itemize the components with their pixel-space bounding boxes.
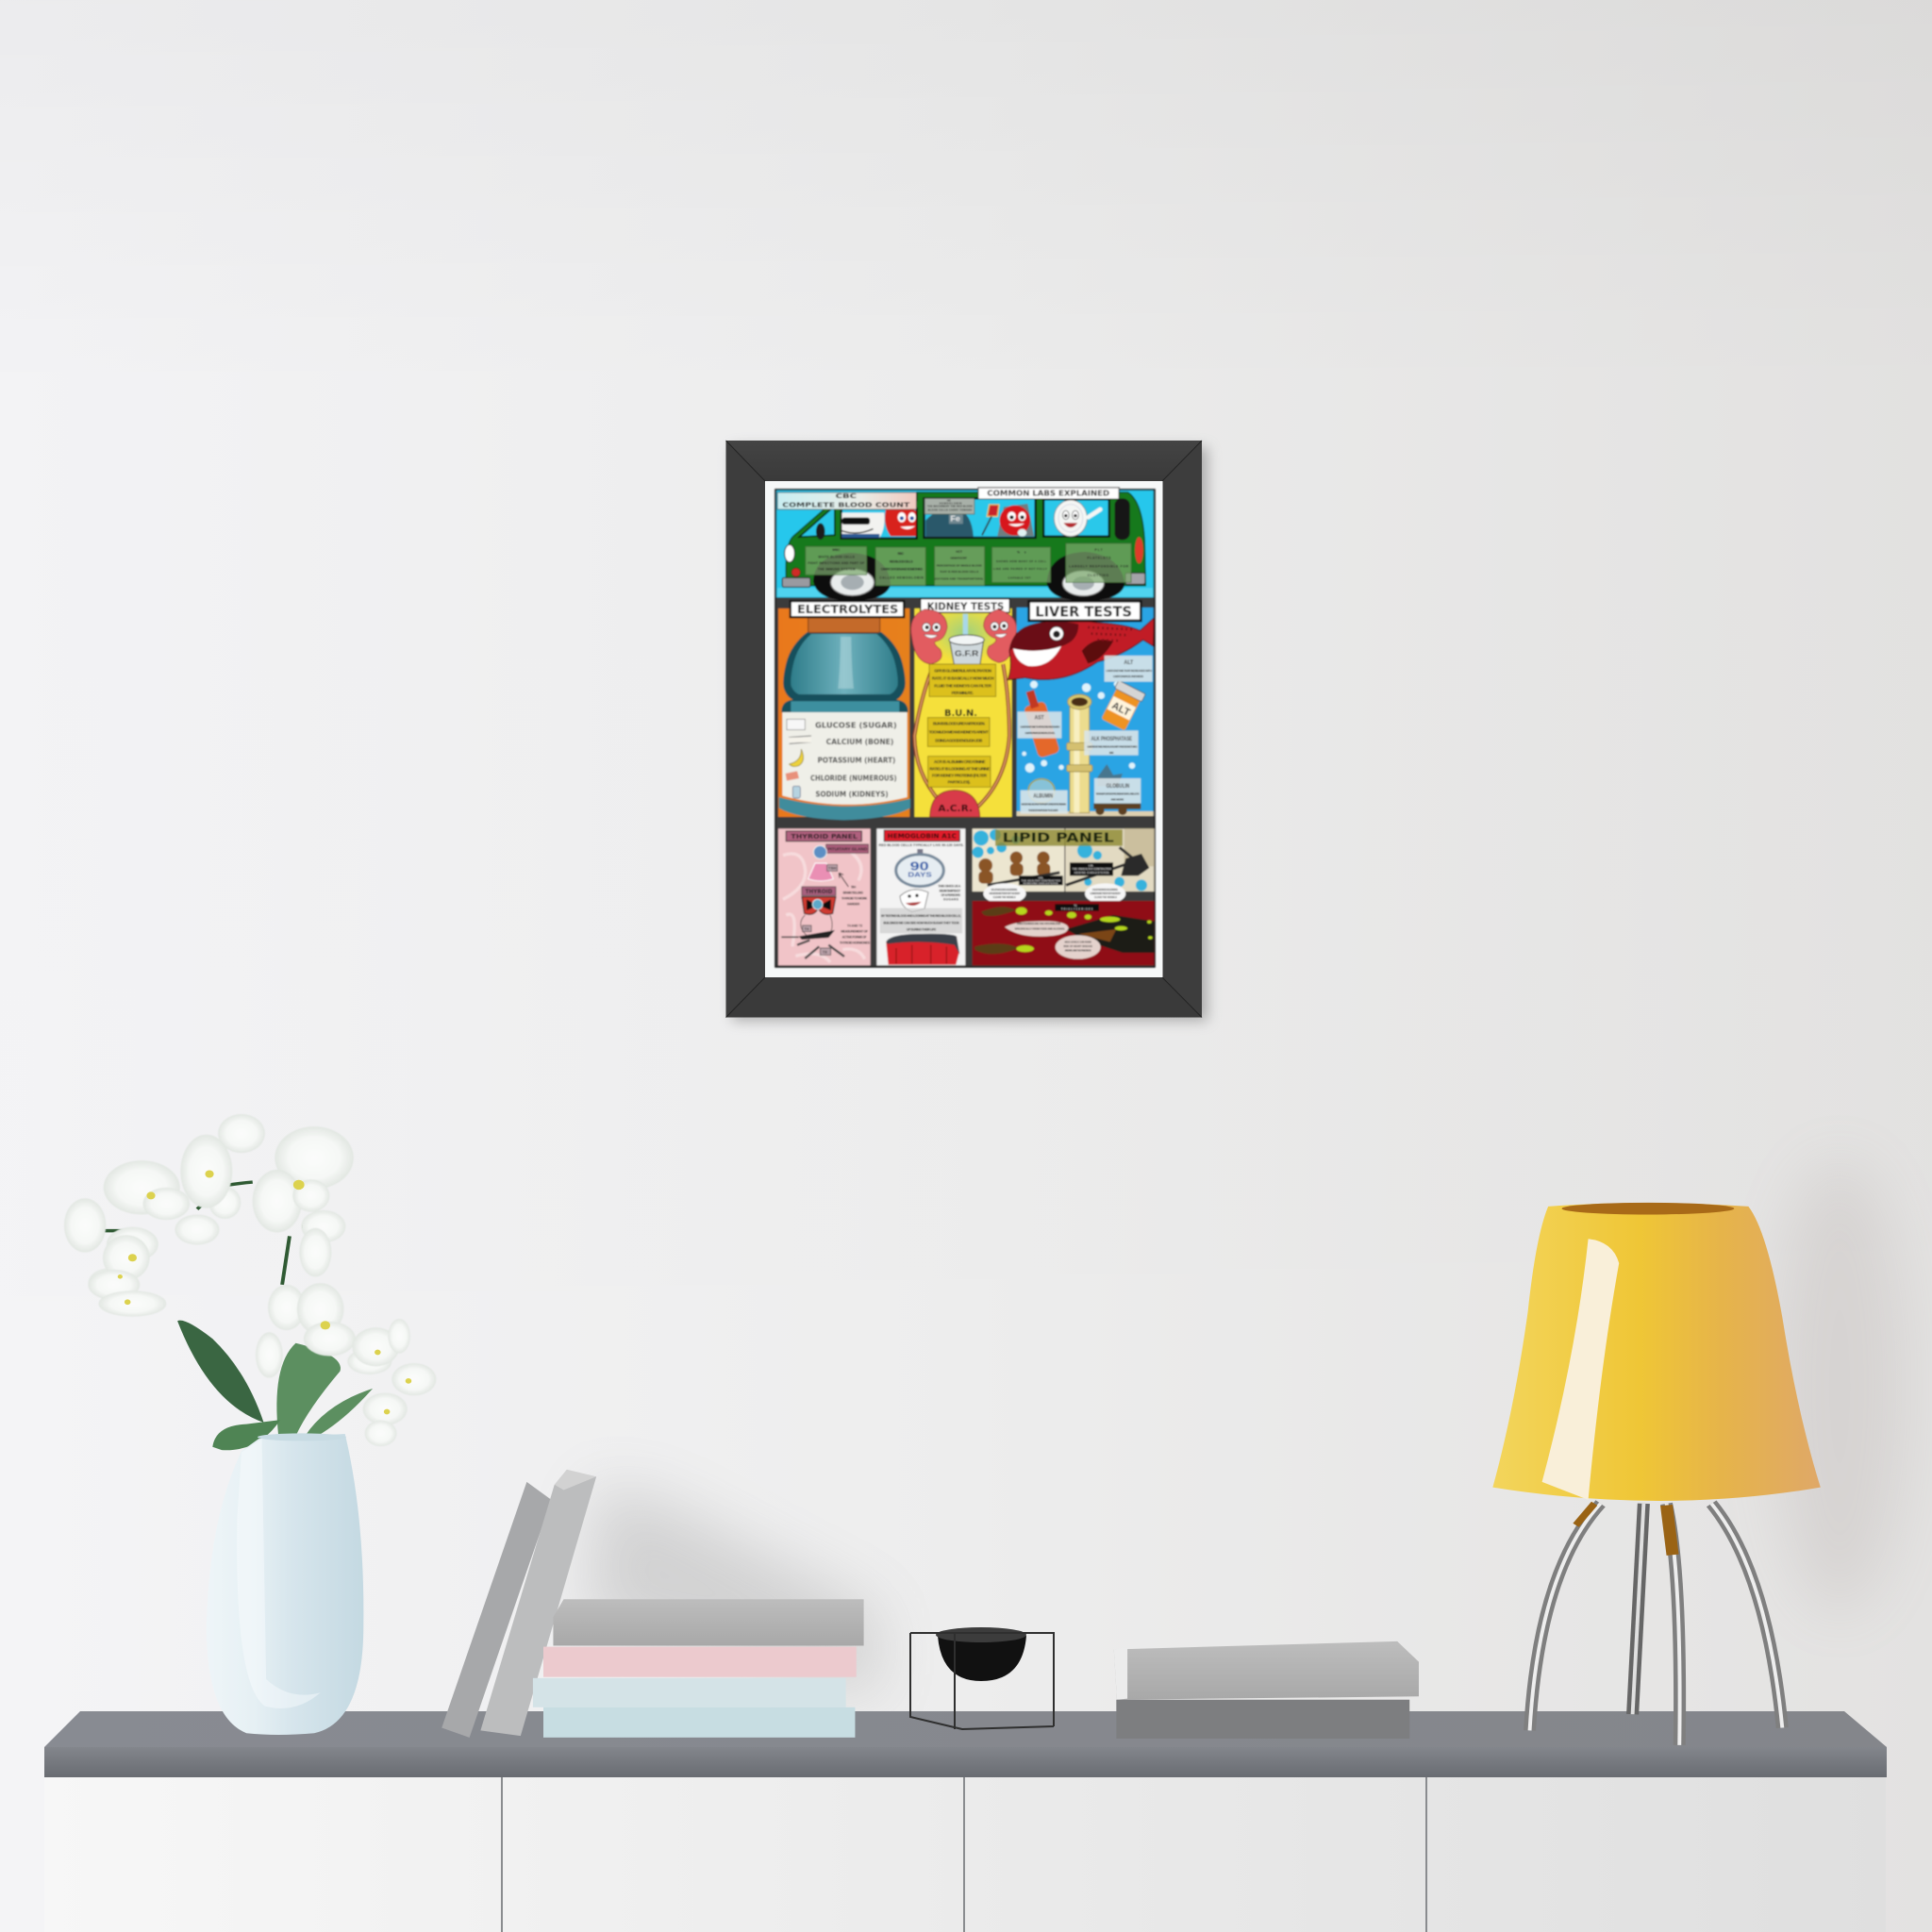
poster artwork [775,488,1155,967]
left kidney [911,609,947,664]
ALK phosphatase box: LIVER ENZYME AND ALKALINITY AND SOMETHING [1087,745,1138,749]
T4 T3 note: MEASUREMENT OF [841,930,868,934]
lower red scene [973,901,1154,965]
title: electrolytes [790,600,905,618]
orange background [778,608,909,817]
sideboard shelf [44,1711,1887,1777]
BUN text box: BUN IS BLOOD UREA NITROGEN. [933,722,985,726]
triglycerides label: TRIGLYCERIDES [1061,908,1093,910]
road streak [777,588,1153,597]
ALT box: LIVER DAMAGE AND MEDS [1113,675,1143,678]
window: hemoglobin iron and red cell: Fe [951,514,960,524]
LDL cloud: CLOGS THE VESSELS [1094,897,1117,899]
glucose row: GLUCOSE (SUGAR) [815,722,897,730]
T3 label: T3 [823,949,827,954]
testing note band: BUILDINGS WE CAN SEE HOW MUCH SUGAR THEY TOOK [883,921,960,924]
ACR text box: RATIO. IT IS LOOKING AT THE URINE [929,766,990,771]
globulin box: GLOBULIN [1107,783,1129,790]
red bag [886,934,959,965]
triglyceride cloud one [1005,921,1069,937]
thyroid label [802,887,836,895]
chloride row: CHLORIDE (NUMEROUS) [810,774,897,782]
blue splats [973,829,1147,891]
rear window [1114,498,1130,540]
HCT info box: PERCENTAGE OF WHOLE BLOOD [937,563,982,567]
ALK phosphatase box: ELSE [1109,751,1114,755]
TSH note: HARDER [847,902,860,906]
PLT info box: CLOTTING [1088,574,1108,577]
vase [207,1433,363,1735]
GFR cup [949,635,984,666]
AST box [1018,711,1061,739]
snapshot note: 90 DAY SNAPSHOT [940,889,960,892]
triglyceride cloud two: AND INFLAME THE PANCREAS [1065,950,1091,953]
white background [876,828,965,965]
ALT box: ALT [1124,659,1133,666]
snapshot note: SUGARS [943,897,959,901]
HCT info box: THAT IS RED BLOOD CELLS [940,570,978,574]
cabinet doors [44,1777,1886,1932]
ACR dome [930,791,980,817]
cart [1093,804,1141,815]
BUN text box: TOO MUCH MEANS KIDNEYS AREN'T [929,730,989,735]
AST box: LIVER ENZYME THAT INCREASES WITH [1021,724,1059,728]
LDL box: THE UNHEALTHY CONTRACTOR [1073,867,1111,871]
snapshot note [938,885,961,901]
orchid flowers [64,1114,436,1446]
T4 T3 note: T4 AND T3 [847,924,862,927]
pituitary gland globe [813,845,826,858]
black bowl [936,1627,1026,1681]
T4 T3 note: THYROID HORMONES [840,941,871,945]
AST sauce bottle [1020,688,1060,758]
percent info box: LINE ARE PAIRED IF NOT FULLY [993,567,1047,571]
flower centres [118,1170,411,1414]
bottle [781,632,908,712]
blood cell character [900,890,928,912]
HG info box: THE MACHINERY THE RED BLOOD [927,505,973,508]
HCT info box: (OXYGEN AND TRANSPORTERS) [935,576,983,580]
TSH note: TSH [851,886,857,890]
TSH label: TSH [828,866,836,871]
RBC info box: CARRY OXYGEN AND SOMETHING [881,568,924,572]
HG info box: HG [947,499,951,503]
AST box: LIVER DAMAGE AND ALCOHOL [1025,731,1056,735]
monkeys [978,852,1050,884]
yellow background [914,608,1012,817]
potassium row [790,749,895,767]
HG info box [924,498,974,514]
CBC heading: CBC [836,492,857,500]
sea floor [1017,811,1154,816]
TSH note: BRAIN TELLING [843,891,863,895]
straw [963,614,968,639]
albumin box: ALBUMIN [1033,792,1053,799]
triglyceride cloud one: TRIGLYCERIDES ARE THE FATS IN BLOOD [1017,922,1060,925]
ACR text box: PARTICLES). [948,780,971,785]
blue background [1017,608,1154,816]
HCT info box [935,546,985,586]
panel: hemoglobin A1C [876,828,965,965]
framed poster [726,441,1208,1021]
ALK phosphatase box: ALK PHOSPHATASE [1091,736,1132,742]
filter tube [914,664,1009,807]
title: common labs explained: COMMON LABS EXPLAINED [987,490,1109,498]
grey book on stack [553,1599,864,1645]
leaning book left [441,1482,551,1738]
testing note band: UP DURING THEIR LIFE [907,928,937,932]
globulin box: TRANSPORTER PROTEIN FOR PLATELETS [1096,792,1140,796]
label [782,712,908,805]
brass pipe [1067,694,1092,813]
bubbles [1022,681,1135,773]
GFR text box: PER MINUTE. [952,691,974,695]
PLT info box: LARGELY RESPONSIBLE FOR [1069,565,1129,569]
panel: thyroid panel [778,828,871,965]
HDL box: THE HEALTHY CONTRACTOR [1022,878,1060,882]
frame shadow [732,447,1208,1021]
blue book [543,1707,855,1738]
triglyceride cloud two [1056,935,1101,959]
WBC info box: WHITE BLOOD CELLS [818,555,856,558]
calcium row: CALCIUM (BONE) [826,738,893,746]
ALT pill bottle: ALT [1110,700,1132,719]
sky [776,491,1154,597]
title: liver tests [1027,600,1142,622]
headlight [785,544,794,562]
tail light [1135,537,1143,563]
wire cube [910,1633,1054,1729]
WBC info box: THE IMMUNE SYSTEM [818,568,856,572]
artwork background [775,490,1155,967]
PLT info box [1066,543,1131,582]
ALT box [1105,656,1153,682]
HG info box: HEMOGLOBIN [940,501,961,505]
triglyceride cloud two: RISK OF HEART DISEASE [1063,945,1092,948]
whale [1008,618,1154,680]
lamp legs [1530,1504,1782,1745]
green glow [929,606,1002,662]
snapshot note: THIS GIVES US A [938,885,961,889]
GFR text box: FLUID THE KIDNEYS CAN FILTER [934,683,992,688]
triglycerides label [1055,904,1099,911]
title: lipid panel: LIPID PANEL [1003,832,1114,846]
CBC heading: COMPLETE BLOOD COUNT [782,501,910,509]
RBC info box: CALLED HEMOGLOBIN [879,575,924,579]
GFR text box: GFR IS GLOMERULAR FILTRATION [934,669,991,674]
HDL box: HDL [1039,875,1044,879]
orchid stem [95,1182,324,1285]
HDL cloud: HIGHER IS BETTER FOR THE BODY [990,893,1021,895]
sodium row [792,786,889,798]
HDL cloud [983,883,1026,904]
PLT info box: PLT [1095,548,1103,552]
WBC info box: WBC [832,548,841,552]
pink book [543,1647,857,1677]
HDL box [1019,875,1063,885]
title: lipid panel [995,829,1123,846]
thyroid label: THYROID [806,889,832,895]
lower dark book [1116,1700,1409,1739]
upper scene [973,828,1064,891]
title: liver tests: LIVER TESTS [1035,604,1132,620]
rear bumper [1125,573,1145,584]
HDL box: REMOVING CHOLESTEROL [1024,881,1058,885]
ACR text box: ACR IS ALBUMIN CREATININE [934,759,986,764]
panel: electrolytes [778,600,910,820]
pink background [778,828,871,965]
ALT pill bottle [1100,680,1145,731]
globulin box: AND MORE [1110,798,1124,802]
cube with black bowl [910,1627,1054,1729]
hallway wall [1124,828,1154,866]
leaves [177,1321,373,1450]
albumin box [1021,791,1068,814]
hormone ship [781,915,844,958]
WBC info box [806,546,867,575]
leaning book right [480,1470,596,1736]
T4 T3 note: ACTIVE FORMS OF [842,936,867,940]
thyroid butterfly [802,897,836,914]
HDL cloud: HDL IS THE GOOD CHOLESTEROL [991,890,1018,891]
white mat [765,481,1162,977]
T3 label [820,948,831,955]
stopwatch: DAYS [908,870,932,878]
front wheel [813,553,891,601]
pituitary label [826,844,869,853]
lifespan sentence: RED BLOOD CELLS TYPICALLY LIVE 90-120 DAYS. [879,843,964,847]
calcium row [789,736,893,746]
right shelf objects [1114,1203,1821,1745]
chloride row [786,771,897,782]
snapshot note: OF A PERSON'S [941,893,961,897]
BUN text box [927,718,990,746]
title [786,831,861,841]
triglyceride cloud two: HIGH LEVELS CAN RAISE [1064,941,1091,943]
front bumper [782,577,810,587]
triglycerides label: TG [1074,906,1077,908]
driver mirror [816,524,824,540]
left shelf objects [64,1114,864,1738]
TSH note: THYROID TO WORK [841,896,868,900]
HCT info box: HCT [956,550,962,554]
title: HEMOGLOBIN A1C [888,832,957,841]
dark arm [988,847,1144,885]
windshield [799,506,835,537]
pale blue book [533,1678,846,1707]
RBC info box [875,547,925,586]
marbled texture [783,849,865,962]
triglyceride cloud one: SPECIFICALLY FROM FOOD AND ALCOHOL [1015,926,1065,930]
LDL cloud [1085,883,1125,904]
window: platelet character [1043,499,1109,537]
WBC info box: FIGHT INFECTIONS AND PART OF [808,561,864,565]
ACR dome: A.C.R. [938,804,973,814]
pink cone [808,863,833,881]
arrow [839,873,848,887]
HDL cloud: CLEANS THE VESSELS [993,896,1016,899]
glucose row [787,719,897,730]
bottle cap [808,617,880,633]
orchid [64,1114,436,1450]
title: common labs explained [978,488,1119,499]
lamp shade [1492,1203,1821,1501]
TSH note [841,886,868,906]
black picture frame [726,441,1202,1017]
percent info box: CAPABLE YET [1008,575,1031,579]
stopwatch [896,849,943,887]
panel: kidney tests [911,599,1017,817]
window: hemoglobin iron and red cell [924,498,1036,538]
albumin box: THE BODY MADE BY THE LIVER [1028,808,1059,812]
pituitary label: PITUITARY GLAND [827,847,868,853]
AST box: AST [1035,715,1044,722]
title: electrolytes: ELECTROLYTES [797,603,898,616]
title: kidney tests: KIDNEY TESTS [927,601,1004,613]
BUN heading: B.U.N. [944,708,977,719]
GFR text box: RATE. IT IS BASICALLY HOW MUCH [932,676,994,681]
LDL box [1070,862,1113,875]
upper grey book [1114,1641,1419,1700]
bottle base [779,797,910,820]
LDL box: LDL [1089,863,1094,867]
rear wheel [1047,552,1124,601]
PLT info box: PLATELETS [1087,557,1111,560]
T4 T3 note [840,924,871,945]
sponge character [1028,779,1055,803]
HCT info box: HEMATOCRIT [951,557,967,560]
LDL cloud: LOWER IS BETTER FOR THE BODY [1090,893,1121,895]
percent info box [991,547,1051,582]
title: THYROID PANEL [791,833,858,841]
RBC info box: RED BLOOD CELLS [890,560,913,564]
testing note band: BY TESTING BLOOD AND LOOKING AT THE RED BLOOD CELLS, [881,914,961,918]
ACR text box: FOR KIDNEY PROTEINS (FILTER [932,774,988,778]
ACR text box [928,757,991,787]
LDL box: ADDING CHOLESTEROL [1074,871,1109,874]
panel: lipid panel [973,828,1154,965]
CBC heading [777,492,916,509]
albumin box: MOST ABUNDANT TRANSPORTER PROTEIN IN [1022,802,1066,806]
potassium row: POTASSIUM (HEART) [818,756,895,764]
window: WBC and RBC characters [841,508,917,539]
indicator light [791,568,800,576]
globulin box [1094,778,1141,804]
bus body [786,492,1145,586]
T4 label: T4 [805,926,809,931]
hallway scene [1065,828,1154,891]
ALK phosphatase box [1084,730,1139,756]
sodium row: SODIUM (KIDNEYS) [815,790,889,798]
LDL cloud: LDL IS THE BAD CHOLESTEROL [1092,889,1119,891]
stopwatch: 90 [910,858,929,873]
ALT box: LIVER ENZYME THAT INCREASES WITH [1106,669,1152,673]
right kidney [984,609,1017,662]
percent info box: %s [1017,551,1026,555]
panel: liver tests [1008,600,1154,816]
HG info box: BLOOD CELLS CARRY TOWARD [928,508,972,511]
seaweed [1097,764,1123,786]
RBC info box: RBC [897,552,905,556]
percent info box: SHOWS HOW MANY OF A CELL [996,559,1046,563]
panel: CBC bus [776,488,1154,601]
dark ape [1121,854,1149,875]
GFR text box [929,664,996,696]
testing note band [880,908,962,933]
T4 label [803,925,811,932]
BUN text box: DOING A GOOD ENOUGH JOB [935,739,982,743]
TSH label [827,865,838,871]
GFR cup: G.F.R [955,648,979,658]
